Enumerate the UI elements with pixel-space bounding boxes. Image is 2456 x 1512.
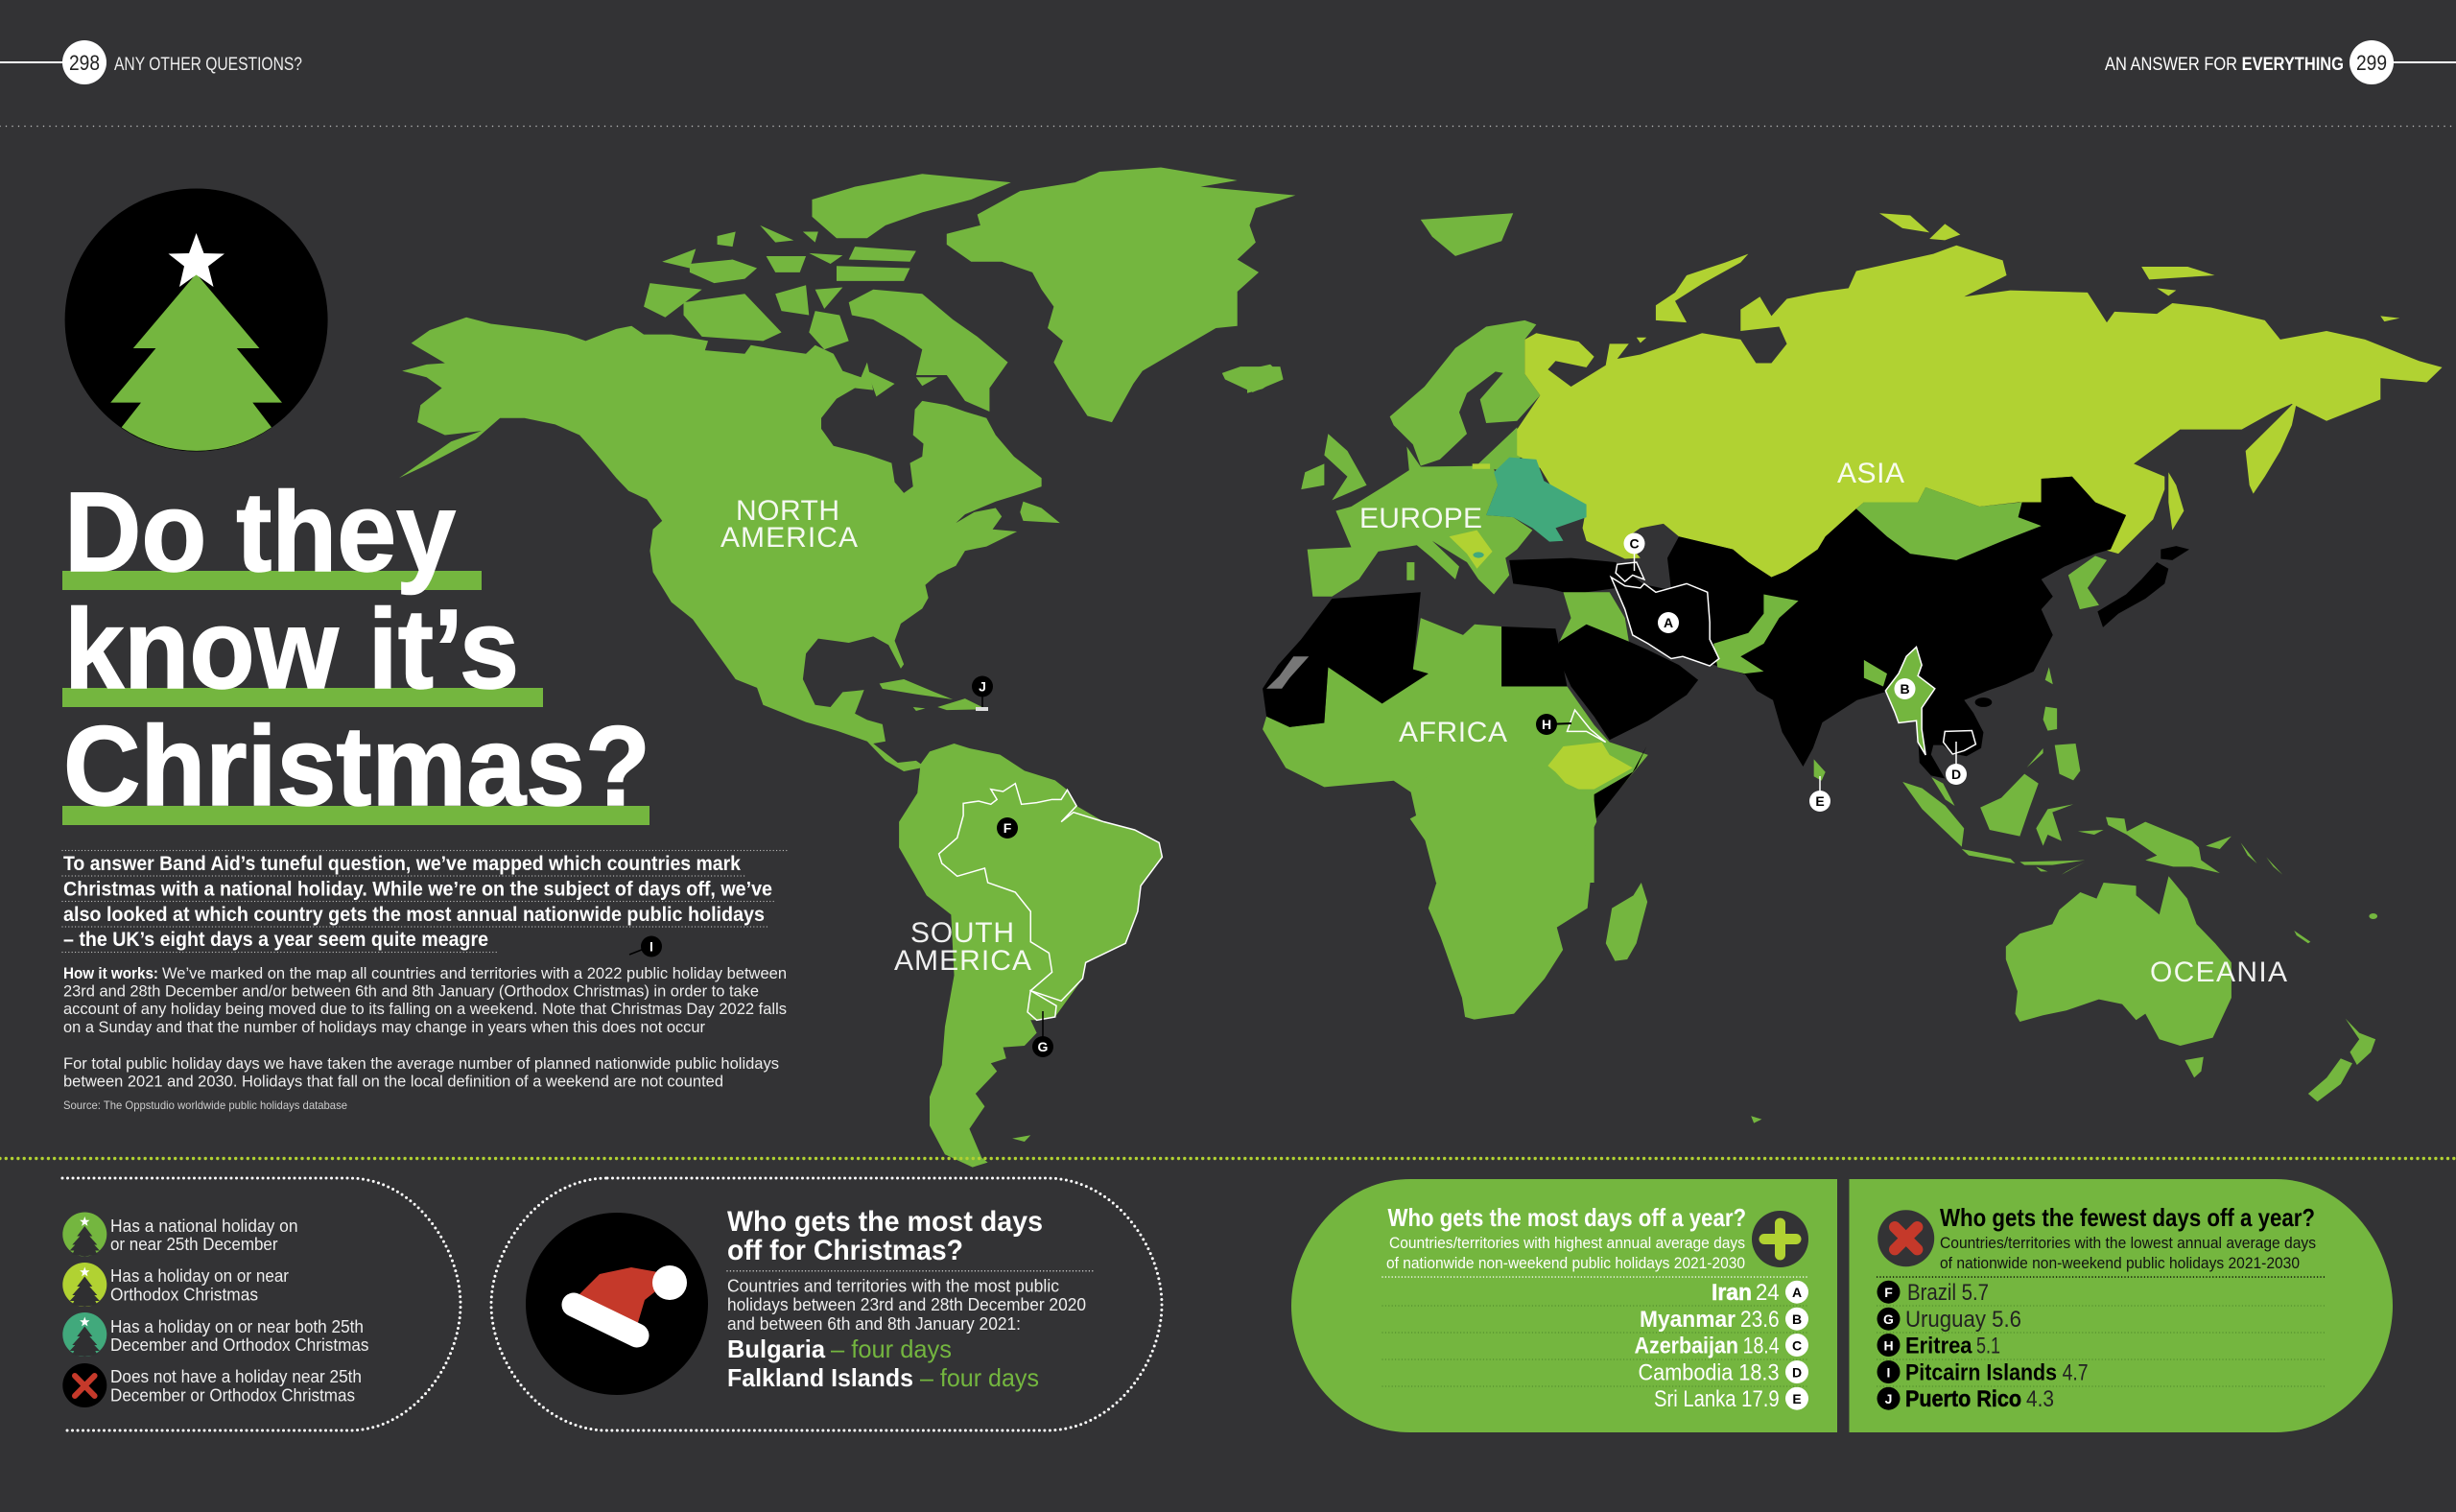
heading: Who gets the fewest days off a year? — [1940, 1203, 2315, 1232]
map pin H: H — [1542, 717, 1551, 732]
panel: fewest days off a year — [1850, 1179, 2393, 1432]
winners: – four days — [831, 1335, 952, 1363]
winners: Bulgaria — [727, 1335, 826, 1363]
Azerbaijan outline — [1616, 562, 1644, 581]
map pin G: G — [1038, 1039, 1049, 1054]
row: Azerbaijan: C — [1792, 1337, 1802, 1353]
title: Christmas? — [63, 703, 650, 830]
row: Eritrea: 5.1 — [1976, 1334, 2000, 1358]
row: Iran: 24 — [1756, 1280, 1780, 1306]
countries with no holiday in black — [1263, 477, 2189, 821]
how it works text: How it works: — [63, 965, 158, 982]
map pin F: F — [1004, 820, 1012, 836]
legend item: no holiday: Does not have a holiday near 25th — [110, 1367, 362, 1386]
map pin D: D — [1951, 767, 1961, 782]
description: Countries/territories with highest annual average days — [1389, 1235, 1745, 1252]
page header right: 299 — [2356, 51, 2387, 75]
winners — [727, 1335, 1039, 1392]
panel: most days off a year — [1291, 1179, 1837, 1432]
map pin I — [629, 936, 662, 957]
Europe and north Africa in green — [1247, 213, 1648, 883]
how it works text: We’ve marked on the map all countries and territories with a 2022 public holiday between — [162, 965, 787, 982]
Uruguay outline — [1027, 991, 1056, 1020]
icon: Santa hat — [526, 1213, 708, 1395]
map pin A: A — [1664, 615, 1673, 630]
green countries across Asia — [1559, 487, 2107, 687]
Brazil outline — [939, 784, 1162, 1001]
page header right — [2105, 40, 2456, 84]
legend item: both holidays: December and Orthodox Christmas — [110, 1335, 368, 1355]
intro text: Christmas with a national holiday. While we’re on the subject of days off, we’ve — [63, 877, 772, 900]
row: Myanmar: B — [1792, 1311, 1802, 1327]
row: Eritrea: H — [1883, 1337, 1894, 1353]
description — [727, 1277, 1086, 1334]
winners: Falkland Islands — [727, 1363, 913, 1392]
row: Cambodia: Cambodia 18.3 — [1639, 1360, 1779, 1385]
legend item: both holidays — [62, 1312, 369, 1357]
row: Brazil: F — [1884, 1285, 1893, 1300]
source: Source: The Oppstudio worldwide public holidays database — [63, 1099, 347, 1112]
legend item: no holiday: December or Orthodox Christmas — [110, 1385, 355, 1405]
intro text: also looked at which country gets the most annual nationwide public holidays — [63, 903, 765, 926]
panel: most days off for Christmas — [491, 1178, 1162, 1430]
map pin E: E — [1815, 793, 1825, 809]
intro text — [62, 850, 787, 952]
map pin A — [1658, 612, 1679, 633]
Sri Lanka — [1814, 759, 1826, 781]
map pin G — [1032, 1011, 1053, 1057]
description: Countries/territories with the lowest annual average days — [1940, 1235, 2316, 1252]
row: Myanmar — [1640, 1307, 1808, 1333]
legend item: Orthodox Christmas: Has a holiday on or near — [110, 1266, 289, 1286]
legend item: 25th December: Has a national holiday on — [110, 1217, 297, 1236]
icon: Christmas tree badge — [65, 188, 328, 451]
title — [62, 469, 650, 830]
legend item: Orthodox Christmas — [62, 1263, 289, 1307]
legend item: 25th December: or near 25th December — [110, 1235, 278, 1254]
winners: – four days — [920, 1363, 1039, 1392]
map pin C: C — [1629, 535, 1640, 551]
legend item: Orthodox Christmas: Orthodox Christmas — [110, 1286, 258, 1305]
icon: red cross — [1877, 1210, 1934, 1266]
intro text: To answer Band Aid’s tuneful question, we’ve mapped which countries mark — [63, 852, 741, 875]
row: Puerto Rico: J — [1885, 1391, 1892, 1406]
continent labels: AMERICA — [894, 945, 1031, 977]
row: Azerbaijan — [1635, 1334, 1808, 1358]
how it works text: 23rd and 28th December and/or between 6th and 8th January (Orthodox Christmas) in order to take — [63, 982, 759, 1000]
continent labels: AFRICA — [1399, 717, 1507, 748]
heading: Who gets the most days — [727, 1206, 1043, 1238]
Western Sahara in grey — [1266, 656, 1309, 689]
description: Countries and territories with the most public — [727, 1277, 1059, 1296]
description — [1940, 1235, 2316, 1272]
legend item: 25th December — [62, 1213, 297, 1257]
row: Pitcairn Islands: 4.7 — [2063, 1360, 2089, 1385]
map pin B: B — [1900, 681, 1910, 697]
row: Iran: A — [1792, 1285, 1802, 1300]
panel: legend — [62, 1178, 460, 1430]
heading: off for Christmas? — [727, 1235, 963, 1266]
how it works text: account of any holiday being moved due to its falling on a weekend. Note that Christmas Day 2022 falls — [63, 1001, 787, 1018]
Russia and Kazakhstan in lime — [1450, 213, 2443, 790]
heading — [727, 1206, 1043, 1266]
legend item: no holiday — [62, 1363, 362, 1407]
row: Brazil — [1877, 1280, 1989, 1306]
description: and between 6th and 8th January 2021: — [727, 1314, 1021, 1334]
map: world holidays — [399, 168, 2443, 1168]
description: of nationwide non-weekend public holidays 2021-2030 — [1940, 1255, 2300, 1272]
how it works text: between 2021 and 2030. Holidays that fall on the local definition of a weekend are not counted — [63, 1073, 723, 1090]
map pin J: J — [979, 679, 986, 695]
Myanmar outline — [1885, 647, 1935, 755]
row: Puerto Rico: Puerto Rico — [1905, 1386, 2021, 1412]
map pin I: I — [649, 938, 653, 954]
row: Iran: Iran — [1712, 1280, 1752, 1306]
row: Cambodia: D — [1792, 1364, 1802, 1380]
row: Azerbaijan: Azerbaijan — [1635, 1334, 1738, 1358]
intro text: – the UK’s eight days a year seem quite meagre — [63, 928, 488, 951]
row: Uruguay: G — [1883, 1311, 1894, 1327]
row: Iran — [1712, 1280, 1808, 1306]
continent labels: AMERICA — [720, 522, 858, 554]
title: know it’s — [64, 586, 519, 713]
map region: South-East Asia and Oceania — [1751, 707, 2377, 1123]
continent labels: NORTH — [736, 495, 839, 527]
page header left: ANY OTHER QUESTIONS? — [114, 55, 302, 75]
row: Pitcairn Islands: I — [1887, 1364, 1890, 1380]
map pin J — [972, 675, 993, 711]
heading: Who gets the most days off a year? — [1387, 1203, 1746, 1232]
map region: South America, Africa south — [899, 744, 1647, 1168]
Eritrea outline — [1567, 710, 1606, 743]
description: holidays between 23rd and 28th December 2020 — [727, 1295, 1086, 1314]
page header right: AN ANSWER FOR EVERYTHING — [2105, 55, 2344, 75]
continent labels: ASIA — [1837, 458, 1904, 489]
continent labels: OCEANIA — [2150, 957, 2287, 988]
title: Do they — [64, 469, 456, 596]
row: Brazil: Brazil 5.7 — [1907, 1280, 1989, 1306]
map pin D — [1946, 742, 1967, 785]
row: Uruguay: Uruguay 5.6 — [1905, 1307, 2021, 1333]
continent labels — [720, 458, 2287, 988]
map pin H — [1536, 714, 1571, 735]
continent labels: EUROPE — [1359, 503, 1482, 534]
row: Myanmar: 23.6 — [1740, 1307, 1780, 1333]
icon: plus — [1752, 1211, 1808, 1267]
description: of nationwide non-weekend public holidays 2021-2030 — [1386, 1255, 1745, 1272]
how it works text: For total public holiday days we have taken the average number of planned nationwide public holidays — [63, 1055, 779, 1073]
row: Sri Lanka: Sri Lanka 17.9 — [1654, 1386, 1780, 1412]
how it works text — [63, 965, 787, 1090]
row: Eritrea — [1877, 1334, 2000, 1358]
row: Puerto Rico: 4.3 — [2026, 1386, 2054, 1412]
map region: Americas and Greenland — [399, 168, 1295, 771]
row: Eritrea: Eritrea — [1905, 1334, 1972, 1358]
continent labels: SOUTH — [910, 917, 1014, 949]
row: Sri Lanka: E — [1792, 1391, 1802, 1406]
map pin F — [997, 817, 1018, 839]
description — [1386, 1235, 1745, 1272]
Iran outline — [1611, 578, 1719, 666]
row: Azerbaijan: 18.4 — [1743, 1334, 1780, 1358]
Ukraine and neighbours in teal — [1473, 458, 1587, 558]
map pin B — [1894, 678, 1915, 699]
how it works text: on a Sunday and that the number of holidays may change in years when this does not occur — [63, 1019, 705, 1036]
map pin E — [1809, 776, 1830, 812]
map pin C — [1623, 533, 1644, 571]
row: Pitcairn Islands: Pitcairn Islands — [1905, 1360, 2057, 1385]
Cambodia outline — [1944, 730, 1975, 754]
map region: Europe, Africa north and Asia — [1247, 213, 2443, 883]
legend item: both holidays: Has a holiday on or near both 25th — [110, 1317, 364, 1336]
row: Myanmar: Myanmar — [1640, 1307, 1736, 1333]
page header left — [0, 40, 302, 84]
page header left: 298 — [69, 51, 100, 75]
